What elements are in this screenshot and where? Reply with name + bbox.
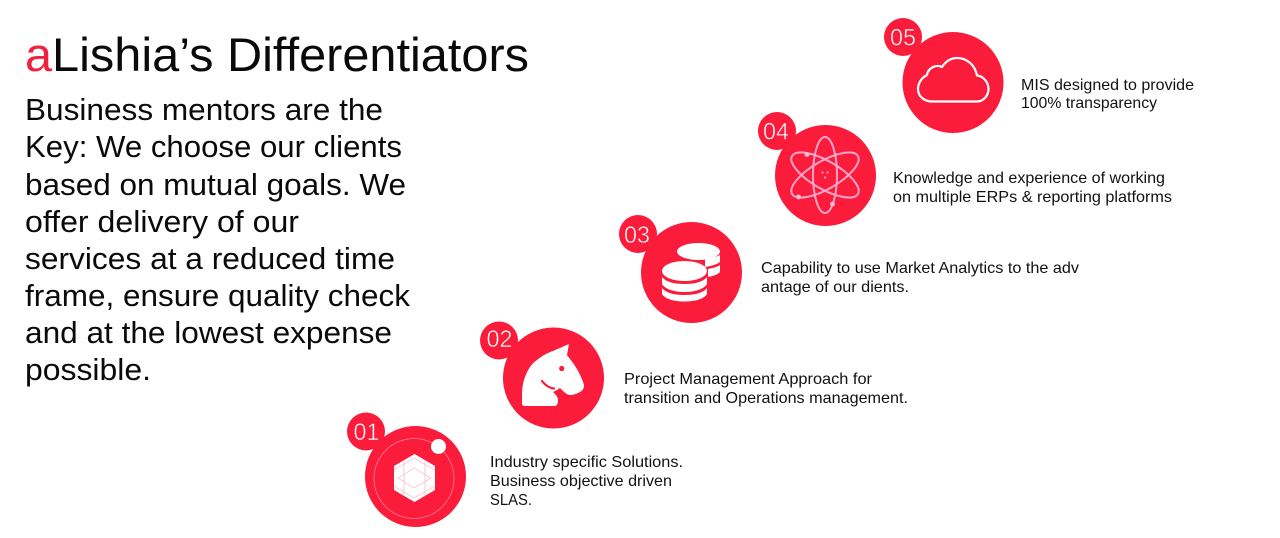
item 05: MIS transparency: [884, 18, 1194, 133]
label 04: on multiple ERPs & reporting platforms: [893, 189, 1172, 206]
intro text block: and at the lowest expense: [25, 315, 392, 350]
icon: chess knight: [503, 328, 604, 428]
label 05: [1021, 77, 1194, 112]
badge 02: [480, 322, 518, 360]
label 02: [624, 371, 908, 407]
intro text block: offer delivery of our: [25, 204, 299, 239]
badge 01: [347, 412, 385, 450]
label 04: Knowledge and experience of working: [893, 170, 1165, 187]
label 02: transition and Operations management.: [624, 390, 908, 407]
badge 03: [619, 215, 657, 253]
badge 01: 01: [354, 419, 380, 446]
label 01: Industry specific Solutions.: [490, 454, 683, 471]
intro text block: Business mentors are the: [25, 92, 383, 127]
label 01: SLAS.: [490, 492, 532, 509]
item 01: industry solutions: [347, 412, 683, 527]
item 03: market analytics: [619, 215, 1079, 323]
intro text block: possible.: [25, 352, 151, 387]
badge 04: 04: [763, 118, 789, 146]
intro text block: Key: We choose our clients: [25, 129, 402, 164]
badge 04: [758, 112, 796, 150]
label 05: 100% transparency: [1021, 95, 1157, 112]
intro text block: based on mutual goals. We: [25, 167, 406, 202]
label 01: [490, 454, 683, 509]
intro text block: frame, ensure quality check: [25, 278, 410, 313]
icon: hexagon in orbit: [365, 426, 466, 527]
title: aLishia’s Differentiators: [25, 28, 529, 81]
label 03: antage of our dients.: [761, 279, 909, 296]
item 02: project management: [480, 322, 908, 428]
label 03: Capability to use Market Analytics to the adv: [761, 260, 1079, 277]
label 01: Business objective driven: [490, 473, 672, 490]
item 04: ERP knowledge: [758, 112, 1172, 226]
icon: atom: [775, 125, 876, 226]
badge 05: [884, 18, 922, 56]
label 04: [893, 170, 1172, 206]
badge 03: 03: [624, 222, 650, 249]
badge 05: 05: [890, 24, 916, 52]
icon: coin stacks: [641, 222, 742, 323]
label 03: [761, 260, 1079, 296]
label 05: MIS designed to provide: [1021, 77, 1194, 94]
icon: cloud: [902, 32, 1004, 133]
label 02: Project Management Approach for: [624, 371, 873, 388]
badge 02: 02: [486, 326, 512, 353]
intro text block: [25, 92, 410, 387]
intro text block: services at a reduced time: [25, 241, 395, 276]
